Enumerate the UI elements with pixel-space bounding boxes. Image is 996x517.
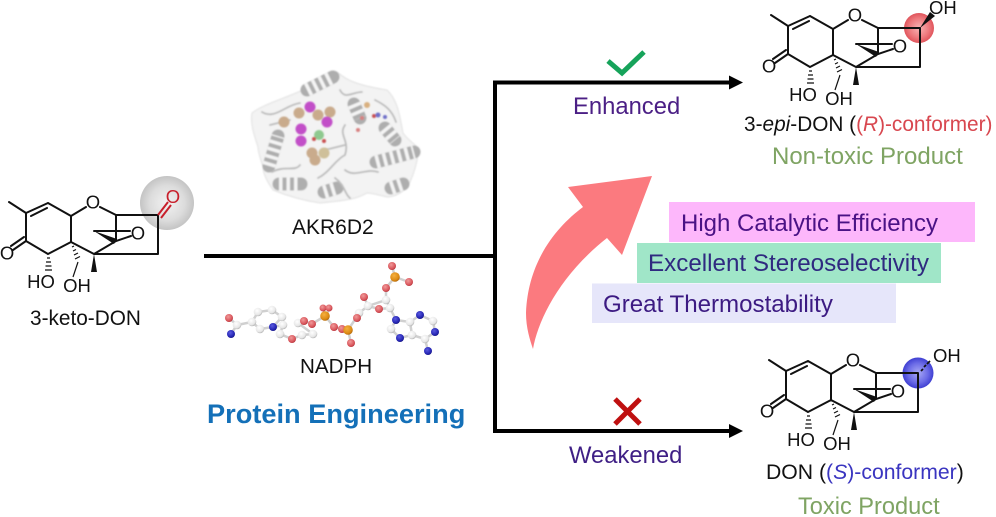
molecule: DON: O <box>846 350 860 370</box>
molecule: 3-epi-DON: O <box>893 36 907 56</box>
tag: Excellent Stereoselectivity: Excellent Stereoselectivity <box>648 250 930 277</box>
tag: High Catalytic Efficiency: High Catalytic Efficiency <box>681 210 938 237</box>
label: AKR6D2: AKR6D2 <box>292 216 374 239</box>
molecule: 3-epi-DON: HO <box>789 84 817 105</box>
reaction arrows <box>204 76 743 438</box>
heading: Protein Engineering: Protein Engineering <box>207 398 465 429</box>
molecule: 3-keto-DON: O <box>131 222 145 244</box>
molecule: DON: O <box>760 400 774 422</box>
molecule: 3-keto-DON: O <box>166 186 180 207</box>
tag: Excellent Stereoselectivity <box>637 243 941 283</box>
label: 3-epi-DON (R)-conformer: 3-epi-DON ((R)-conformer) <box>744 113 992 136</box>
molecule: DON: O <box>891 380 905 402</box>
label: Enhanced: Enhanced <box>573 93 680 120</box>
tag: High Catalytic Efficiency <box>669 202 975 242</box>
label: DON (S)-conformer: DON ((S)-conformer) <box>766 461 964 484</box>
tag: Great Thermostability <box>592 284 896 323</box>
molecule: DON: OH <box>933 345 961 366</box>
label: Non-toxic Product: Non-toxic Product <box>772 143 963 170</box>
molecule: 3-keto-DON <box>0 176 194 296</box>
molecule: 3-keto-DON: O <box>0 242 14 264</box>
molecule: 3-epi-DON: O <box>848 4 862 26</box>
molecule: 3-epi-DON <box>762 0 957 109</box>
label: Weakened: Weakened <box>569 442 682 469</box>
tag: Great Thermostability: Great Thermostability <box>603 291 833 318</box>
ball-and-stick model: NADPH <box>225 262 439 355</box>
curved arrow: improvement <box>526 176 652 349</box>
icon: green check mark <box>608 52 644 73</box>
molecule: 3-epi-DON: OH <box>825 88 853 109</box>
molecule: 3-keto-DON: O <box>86 192 100 212</box>
molecule: DON <box>760 345 961 454</box>
molecule: 3-epi-DON: O <box>762 56 776 76</box>
icon: red cross <box>615 399 640 424</box>
molecule: DON: HO <box>787 429 815 450</box>
label: 3-keto-DON: 3-keto-DON <box>30 307 141 330</box>
label: NADPH: NADPH <box>300 355 372 378</box>
molecule: DON: OH <box>823 433 851 454</box>
protein structure: AKR6D2 <box>251 72 418 203</box>
molecule: 3-keto-DON: HO <box>27 271 55 292</box>
molecule: 3-keto-DON: OH <box>63 275 91 296</box>
